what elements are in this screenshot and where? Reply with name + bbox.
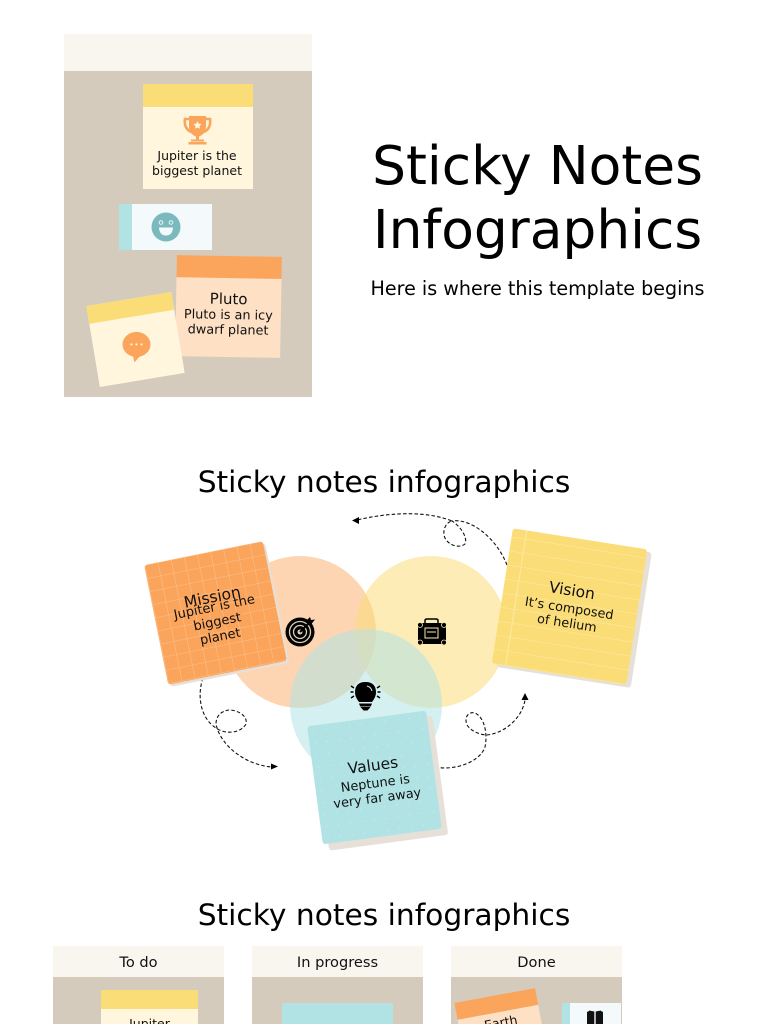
- note: cyan: [282, 1003, 393, 1024]
- note text: [328, 751, 423, 812]
- note text: Jupiter is the: [172, 592, 256, 623]
- note: Earth: [454, 988, 549, 1024]
- note text: [169, 580, 262, 653]
- circle: mission: [224, 556, 376, 708]
- icon: speech bubble: [122, 332, 150, 362]
- note text: [184, 289, 274, 339]
- note text: Vision: [548, 578, 596, 603]
- note text: Pluto: [210, 290, 248, 308]
- icon: light bulb: [350, 682, 380, 710]
- note: speech bubble: [86, 292, 185, 387]
- note text: Pluto is an icy: [184, 307, 273, 324]
- arrow: values to vision: [435, 693, 528, 768]
- circle: vision: [355, 556, 507, 708]
- board body: [64, 71, 312, 397]
- note text: Values: [347, 753, 399, 778]
- note text: [152, 148, 242, 178]
- icon: book: [587, 1010, 603, 1024]
- panel: To do: [53, 946, 224, 1024]
- note text: It’s composed: [524, 595, 615, 623]
- icon: smiley face: [152, 212, 180, 242]
- column body: [451, 977, 622, 1024]
- note text: planet: [199, 626, 242, 648]
- heading: kanban section: Sticky notes infographics: [198, 898, 570, 933]
- title: Sticky Notes: [372, 134, 703, 197]
- column label: Done: [517, 954, 556, 971]
- panel: In progress: [252, 946, 423, 1024]
- note: Mission: [144, 541, 289, 687]
- icon: trophy: [185, 116, 210, 144]
- column header: [252, 946, 423, 977]
- arrow: mission to values: [200, 678, 278, 770]
- note: Jupiter: [101, 990, 198, 1024]
- note text: very far away: [333, 785, 423, 812]
- column body: [53, 977, 224, 1024]
- column body: [252, 977, 423, 1024]
- icon: target: [286, 617, 315, 646]
- column label: In progress: [297, 954, 378, 971]
- column label: To do: [118, 954, 158, 971]
- note: Vision: [491, 528, 652, 688]
- heading: venn section: Sticky notes infographics: [198, 465, 570, 500]
- panel: Done: [451, 946, 622, 1024]
- note text: [521, 575, 618, 638]
- column header: [451, 946, 622, 977]
- venn diagram: [224, 556, 507, 781]
- note: Jupiter: [143, 84, 253, 189]
- note text: of helium: [536, 612, 598, 636]
- column header: [53, 946, 224, 977]
- note text: biggest planet: [152, 163, 242, 178]
- note text: dwarf planet: [188, 322, 269, 339]
- note: smiley: [119, 204, 212, 250]
- arrow: vision to mission: [352, 514, 507, 565]
- note: book: [562, 1003, 621, 1024]
- note: Values: [307, 710, 448, 851]
- circle: values: [290, 629, 442, 781]
- note text: Mission: [182, 583, 242, 612]
- panel: board with sticky notes: [64, 34, 312, 397]
- subtitle: Here is where this template begins: [371, 277, 704, 300]
- note text: biggest: [192, 610, 243, 634]
- title: [372, 134, 703, 261]
- note: Pluto: [175, 255, 282, 358]
- note text: Jupiter is the: [156, 148, 237, 163]
- icon: briefcase: [418, 619, 446, 645]
- title: Infographics: [373, 198, 702, 261]
- board header: [64, 34, 312, 71]
- note text: Neptune is: [340, 772, 411, 796]
